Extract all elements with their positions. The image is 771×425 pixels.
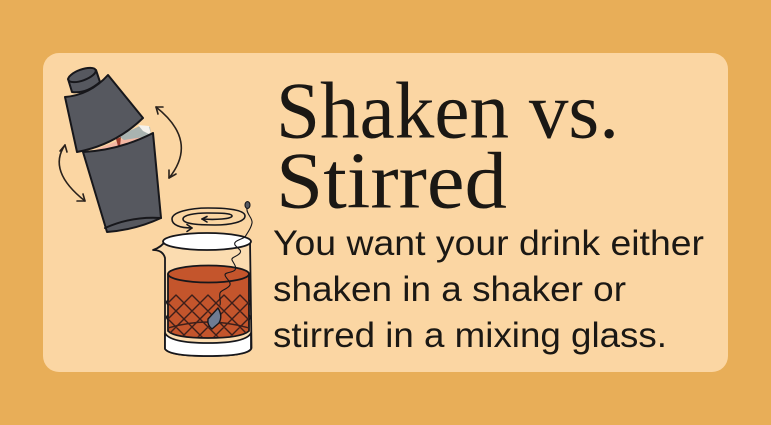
arrow: right curved motion arrow <box>156 107 181 178</box>
rocks glass diamond pattern <box>168 294 249 337</box>
ice cube <box>208 308 221 329</box>
bar spoon <box>220 202 252 305</box>
body line 2: shaken in a shaker or <box>273 270 626 309</box>
whiskey <box>168 274 249 338</box>
shaker liquid and strainer <box>92 125 152 152</box>
body line 3: stirred in a mixing glass. <box>273 316 667 355</box>
title line 2: Stirred <box>276 136 507 226</box>
shaker cap <box>68 70 100 92</box>
icon: cocktail shaker <box>65 65 161 232</box>
shaker lid <box>65 75 143 152</box>
title line 1: Shaken vs. <box>276 66 619 156</box>
icon: mixing glass <box>152 201 253 357</box>
body text <box>273 224 704 355</box>
stir swirl <box>172 208 245 232</box>
glass base <box>165 333 251 356</box>
glass dimples <box>166 300 250 320</box>
panel: card <box>43 53 728 372</box>
body line 1: You want your drink either <box>273 224 704 263</box>
title <box>276 66 619 226</box>
beaker <box>153 240 252 356</box>
arrow: left curved motion arrow <box>59 145 85 201</box>
shaker body <box>83 133 161 232</box>
